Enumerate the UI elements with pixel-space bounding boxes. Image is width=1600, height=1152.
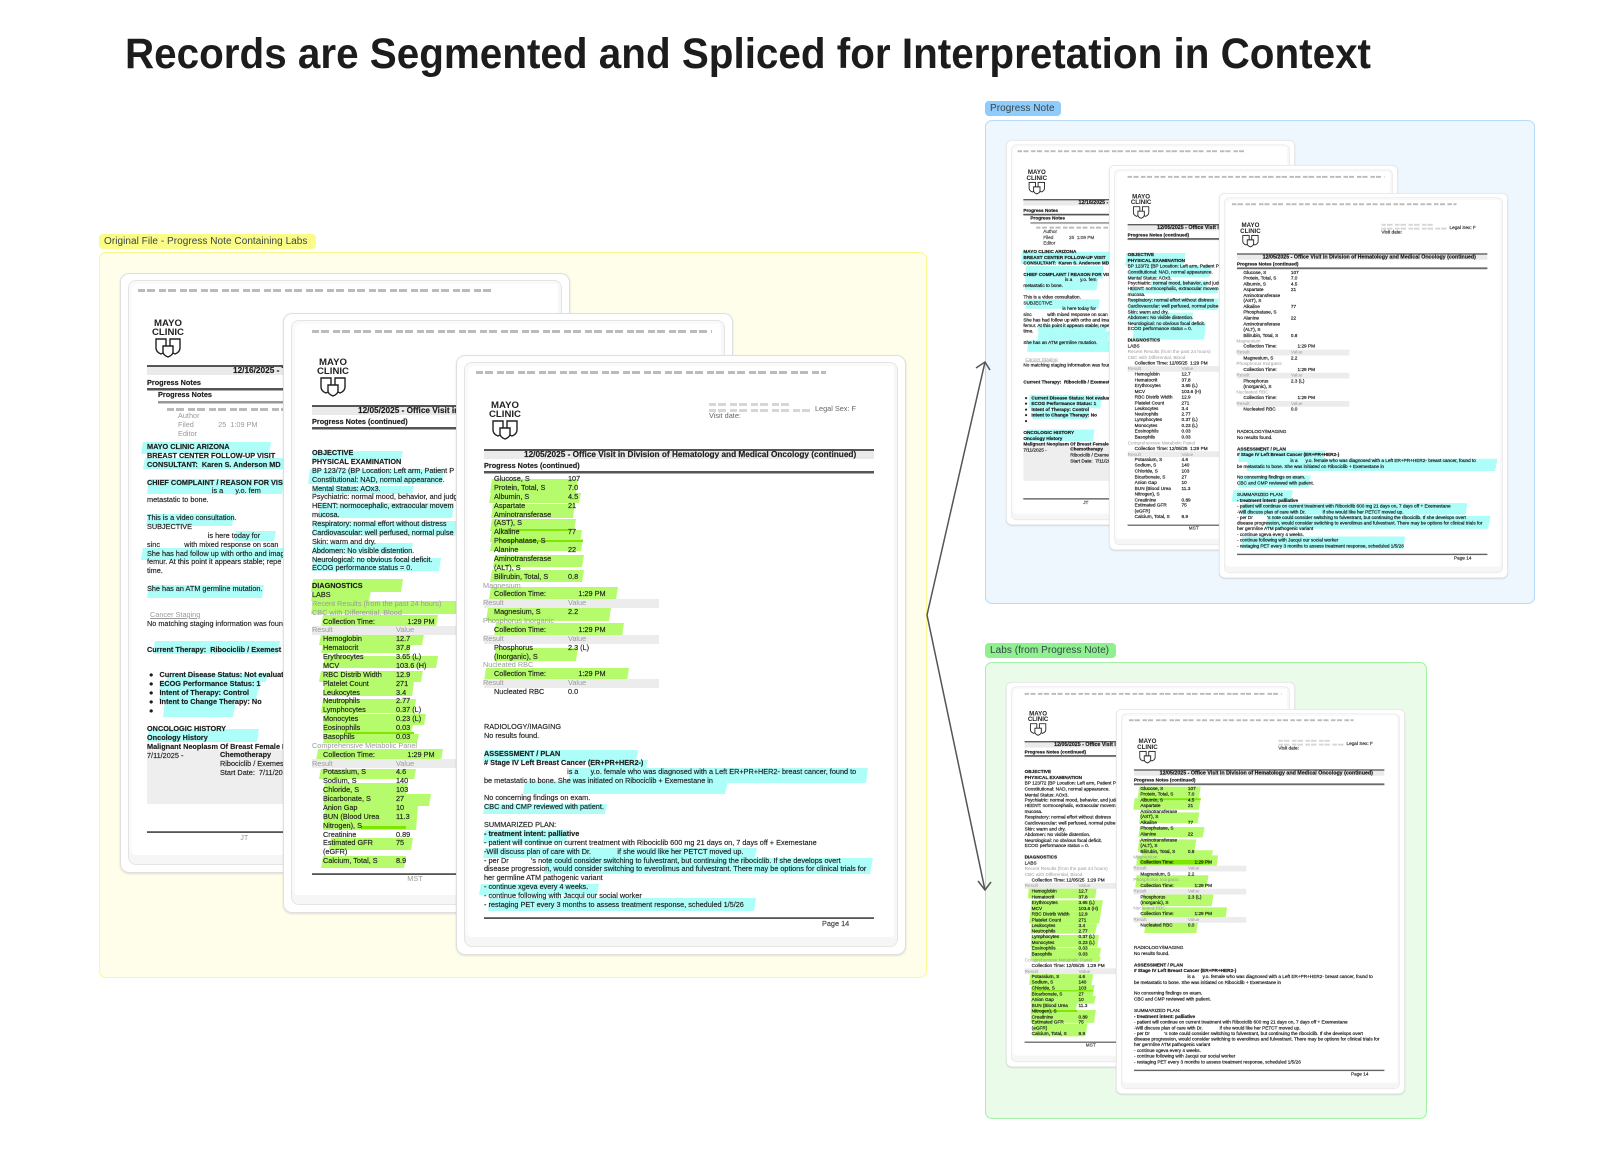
logo: MAYO CLINIC: [1240, 222, 1261, 234]
lab labels: Collection Time: 1:29 PM Result Hemoglobin Hematocrit Erythrocytes MCV RBC Distrib Width Platelet Count Leukocytes Neutrophils Lymphocytes Monocytes Eosinophils Basophils Comprehensive Metabolic Panel Collection Time: 1:29 PM Result Potassium, S Sodium, S Chloride, S Bicarbonate, S Anion Gap BUN (Blood Urea Nitrogen), S Creatinine Estimated GFR (eGFR) Calcium, Total, S: [312, 616, 435, 865]
logo: [317, 357, 349, 397]
panel: progress note: [985, 120, 1535, 604]
oncologic history: ONCOLOGIC HISTORY Oncology History Malignant Neoplasm Of Breast Female Left 7/11/2025 -: [147, 724, 295, 760]
page: progress note page 1: Progress Notes: [1030, 215, 1065, 221]
logo: [152, 318, 184, 358]
page: original progress note page 2: [283, 313, 733, 913]
date heading: 12/05/2025 - Office Visit in Division of Hematology and Medical Oncology (continued): [1263, 254, 1476, 260]
lab values: 107 7.0 4.5 21 77 22 0.8 Value 2.2 Value 2.3 (L) Value 0.0: [568, 474, 589, 696]
badge: original file: [99, 234, 316, 249]
logo: MAYO CLINIC: [152, 318, 184, 338]
logo: [1128, 739, 1167, 769]
lab labels: Glucose, S Protein, Total, S Albumin, S Aspartate Aminotransferase (AST), S Alkaline Phosphatase, S Alanine Aminotransferase (ALT), S Bilirubin, Total, S Magnesium Collection Time: 1:29 PM Result Magnesium, S Phosphorus Inorganic Collection Time: 1:29 PM Result Phosphorus (Inorganic), S Nucleated RBC Collection Time: 1:29 PM Result Nucleated RBC: [1133, 785, 1212, 928]
date heading: 12/05/2025 - Office Visit in Di: [1157, 225, 1229, 230]
highlights: [479, 479, 873, 911]
highlights: [1125, 253, 1219, 340]
patient header: Legal Sex: F: [1449, 224, 1476, 230]
progress notes heading: Progress Notes (continued): [1134, 777, 1195, 783]
page: original progress note page 1: [120, 273, 570, 873]
logo: MAYO CLINIC: [317, 357, 349, 377]
badge: labs: [985, 643, 1116, 658]
oncologic history: ONCOLOGIC HISTORY Oncology History Malignant Neoplasm Of Breast Female Left 7/11/2025 -: [1023, 430, 1119, 452]
current therapy: Current Therapy: Ribociclib / Exemest: [1023, 379, 1110, 385]
highlights: [1007, 683, 1296, 1068]
lab labels: Collection Time: 12/05/25 1:29 PM Result Hemoglobin Hematocrit Erythrocytes MCV RBC Distrib Width Platelet Count Leukocytes Neutrophils Lymphocytes Monocytes Eosinophils Basophils Comprehensive Metabolic Panel Collection Time: 12/05/25 1:29 PM Result Potassium, S Sodium, S Chloride, S Bicarbonate, S Anion Gap BUN (Blood Urea Nitrogen), S Creatinine Estimated GFR (eGFR) Calcium, Total, S: [1128, 360, 1208, 519]
therapy table: Chemotherapy Ribociclib / Exemes Start Date: 7/11/20: [1070, 446, 1111, 463]
progress notes heading: Progress Notes: [1023, 207, 1058, 213]
badge: original file: Original File - Progress Note Containing Labs: [104, 236, 307, 247]
lab labels: Glucose, S Protein, Total, S Albumin, S Aspartate Aminotransferase (AST), S Alkaline Phosphatase, S Alanine Aminotransferase (ALT), S Bilirubin, Total, S Magnesium Collection Time: 1:29 PM Result Magnesium, S Phosphorus Inorganic Collection Time: 1:29 PM Result Phosphorus (Inorganic), S Nucleated RBC Collection Time: 1:29 PM Result Nucleated RBC: [1236, 269, 1315, 412]
assessment and plan: RADIOLOGY/IMAGING No results found. ASSESSMENT / PLAN # Stage IV Left Breast Cancer (ER+PR+HER2-) is a y.o. female who was diagnosed with a Left ER+PR+HER2- breast cancer, found to be metastatic to bone. She was initiated on Ribociclib + Exemestane in No concerning findings on exam. CBC and CMP reviewed with patient. SUMMARIZED PLAN: - treatment intent: palliative - patient will continue on current treatment with Ribociclib 600 mg 21 days on, 7 days off + Exemestane -Will discuss plan of care with Dr. if she would like her PETCT moved up. - per Dr 's note could consider switching to fulvestrant, but continuing the ribociclib. If she develops overt disease progression, would consider switching to everolimus and fulvestrant. There may be options for clinical trials for her germline ATM pathogenic variant - continue xgeva every 4 weeks. - continue following with Jacqui our social worker - restaging PET every 3 months to assess treatment response, scheduled 1/5/26: [1134, 945, 1379, 1065]
page: labs page 2: Visit date:: [1278, 745, 1299, 751]
lab labels: Glucose, S Protein, Total, S Albumin, S Aspartate Aminotransferase (AST), S Alkaline Phosphatase, S Alanine Aminotransferase (ALT), S Bilirubin, Total, S Magnesium Collection Time: 1:29 PM Result Magnesium, S Phosphorus Inorganic Collection Time: 1:29 PM Result Phosphorus (Inorganic), S Nucleated RBC Collection Time: 1:29 PM Result Nucleated RBC: [483, 474, 606, 696]
progress notes heading: Progress Notes: [147, 378, 201, 387]
footer: MST: [1189, 525, 1199, 531]
arrow: to progress note: [920, 355, 1000, 623]
progress notes heading: Progress Notes (continued): [312, 417, 408, 426]
footer: JT: [240, 833, 248, 842]
page number: Page 14: [1454, 555, 1471, 561]
progress notes heading: Progress Notes (continued): [1128, 232, 1189, 238]
highlights: [1117, 710, 1406, 1095]
page: labs page 1: [1006, 682, 1295, 1067]
logo: MAYO CLINIC: [1028, 710, 1048, 723]
badge: progress note: [985, 101, 1061, 116]
progress notes heading: Progress Notes (continued): [1025, 749, 1086, 755]
lab values: 107 7.0 4.5 21 77 22 0.8 Value 2.2 Value 2.3 (L) Value 0.0: [1291, 269, 1304, 412]
page: original progress note page 1: Progress Notes: [158, 390, 212, 399]
logo: MAYO CLINIC: [1027, 169, 1047, 181]
panel: labs: [985, 662, 1427, 1119]
footer: MST: [407, 874, 423, 883]
page number: Page 14: [822, 919, 849, 928]
date heading: 12/16/2025 - Te: [233, 366, 291, 375]
footer: JT: [1083, 500, 1088, 505]
page: progress note page 2: [1109, 165, 1398, 550]
lab labels: Collection Time: 12/05/25 1:29 PM Result Hemoglobin Hematocrit Erythrocytes MCV RBC Distrib Width Platelet Count Leukocytes Neutrophils Lymphocytes Monocytes Eosinophils Basophils Comprehensive Metabolic Panel Collection Time: 12/05/25 1:29 PM Result Potassium, S Sodium, S Chloride, S Bicarbonate, S Anion Gap BUN (Blood Urea Nitrogen), S Creatinine Estimated GFR (eGFR) Calcium, Total, S: [1025, 877, 1105, 1036]
logo: [1131, 193, 1152, 219]
lab values: Value 12.7 37.8 3.65 (L) 103.6 (H) 12.9 271 3.4 2.77 0.37 (L) 0.23 (L) 0.03 0.03 Value 4.6 140 103 27 10 11.3 0.89 75 8.9: [396, 625, 426, 865]
date heading: 12/05/2025 - Office Visit in Di: [358, 406, 470, 415]
panel: original file: [99, 252, 927, 978]
date heading: 12/05/2025 - Office Visit in Division of Hematology and Medical Oncology (continued): [524, 450, 856, 459]
date heading: 12/05/2025 - Office Visit in Division of Hematology and Medical Oncology (continued): [1160, 770, 1373, 776]
note body text: MAYO CLINIC ARIZONA BREAST CENTER FOLLOW-UP VISIT CONSULTANT: Karen S. Anderson MD CHIEF COMPLAINT / REASON FOR VIS is a y.o. fem metastatic to bone. This is a video consultation. SUBJECTIVE is here today for sinc with mixed response on scan She has had follow up with ortho and imag femur. At this point it appears stable; repe time. She has an ATM germline mutation.: [1023, 248, 1112, 345]
cancer staging: Cancer Staging No matching staging information was found for: [1023, 356, 1120, 368]
page: progress note page 1: [1006, 140, 1295, 525]
date heading: 12/16/2025 - Te: [1079, 200, 1116, 205]
progress notes heading: Progress Notes (continued): [484, 461, 580, 470]
logo: [1026, 169, 1047, 194]
date heading: 12/05/2025 - Office Visit in Di: [1054, 742, 1126, 747]
exam and labs headings: OBJECTIVE PHYSICAL EXAMINATION BP 123/72 (BP Location: Left arm, Patient P Constitutional: NAD, normal appearance. Mental Status: AOx3. Psychiatric: normal mood, behavior, and judg HEENT: normocephalic, extraocular movem mucosa. Respiratory: normal effort without distress Cardiovascular: well perfused, normal pulse Skin: warm and dry. Abdomen: No visible distention. Neurological: no obvious focal deficit. ECOG performance status = 0. DIAGNOSTICS LABS Recent Results (from the past 24 hours) CBC with Differential, Blood: [312, 448, 458, 617]
status bullets: ● Current Disease Status: Not evaluat ● ECOG Performance Status: 1 ● Intent of Therapy: Control ● Intent to Change Therapy: No ●: [149, 670, 284, 714]
assessment and plan: RADIOLOGY/IMAGING No results found. ASSESSMENT / PLAN # Stage IV Left Breast Cancer (ER+PR+HER2-) is a y.o. female who was diagnosed with a Left ER+PR+HER2- breast cancer, found to be metastatic to bone. She was initiated on Ribociclib + Exemestane in No concerning findings on exam. CBC and CMP reviewed with patient. SUMMARIZED PLAN: - treatment intent: palliative - patient will continue on current treatment with Ribociclib 600 mg 21 days on, 7 days off + Exemestane -Will discuss plan of care with Dr. if she would like her PETCT moved up. - per Dr 's note could consider switching to fulvestrant, but continuing the ribociclib. If she develops overt disease progression, would consider switching to everolimus and fulvestrant. There may be options for clinical trials for her germline ATM pathogenic variant - continue xgeva every 4 weeks. - continue following with Jacqui our social worker - restaging PET every 3 months to assess treatment response, scheduled 1/5/26: [1237, 429, 1482, 549]
cyan highlights: [141, 442, 283, 742]
page: progress note page 3: [1219, 193, 1508, 578]
page: labs page 2: [1116, 709, 1405, 1094]
title: Records are Segmented and Spliced for Interpretation in Context: [125, 30, 1371, 78]
page: original progress note page 3: Visit date:: [709, 411, 741, 420]
badge: progress note: Progress Note: [990, 103, 1055, 114]
page: original progress note page 3: [456, 355, 906, 955]
logo: MAYO CLINIC: [1137, 738, 1158, 750]
therapy table: Chemotherapy Ribociclib / Exemes Start Date: 7/11/20: [220, 750, 284, 777]
assessment and plan: RADIOLOGY/IMAGING No results found. ASSESSMENT / PLAN # Stage IV Left Breast Cancer (ER+PR+HER2-) is a y.o. female who was diagnosed with a Left ER+PR+HER2- breast cancer, found to be metastatic to bone. She was initiated on Ribociclib + Exemestane in No concerning findings on exam. CBC and CMP reviewed with patient. SUMMARIZED PLAN: - treatment intent: palliative - patient will continue on current treatment with Ribociclib 600 mg 21 days on, 7 days off + Exemestane -Will discuss plan of care with Dr. if she would like her PETCT moved up. - per Dr 's note could consider switching to fulvestrant, but continuing the ribociclib. If she develops overt disease progression, would consider switching to everolimus and fulvestrant. There may be options for clinical trials for her germline ATM pathogenic variant - continue xgeva every 4 weeks. - continue following with Jacqui our social worker - restaging PET every 3 months to assess treatment response, scheduled 1/5/26: [484, 722, 866, 909]
patient header: Legal Sex: F: [1346, 740, 1373, 746]
note body text: MAYO CLINIC ARIZONA BREAST CENTER FOLLOW-UP VISIT CONSULTANT: Karen S. Anderson MD CHIEF COMPLAINT / REASON FOR VIS is a y.o. fem metastatic to bone. This is a video consultation. SUBJECTIVE is here today for sinc with mixed response on scan She has had follow up with ortho and imag femur. At this point it appears stable; repe time. She has an ATM germline mutation.: [147, 442, 285, 593]
arrow: to labs: [920, 610, 1000, 900]
footer: MST: [1086, 1042, 1096, 1048]
highlights: [308, 451, 456, 868]
exam and labs headings: OBJECTIVE PHYSICAL EXAMINATION BP 123/72 (BP Location: Left arm, Patient P Constitutional: NAD, normal appearance. Mental Status: AOx3. Psychiatric: normal mood, behavior, and judg HEENT: normocephalic, extraocular movem mucosa. Respiratory: normal effort without distress Cardiovascular: well perfused, normal pulse Skin: warm and dry. Abdomen: No visible distention. Neurological: no obvious focal deficit. ECOG performance status = 0. DIAGNOSTICS LABS Recent Results (from the past 24 hours) CBC with Differential, Blood: [1025, 769, 1118, 877]
page number: Page 14: [1351, 1071, 1368, 1077]
highlights: [1020, 252, 1109, 442]
logo: [1231, 223, 1270, 253]
lab values: Value 12.7 37.8 3.65 (L) 103.6 (H) 12.9 271 3.4 2.77 0.37 (L) 0.23 (L) 0.03 0.03 Value 4.6 140 103 27 10 11.3 0.89 75 8.9: [1079, 883, 1098, 1036]
patient header: Legal Sex: F: [815, 404, 856, 413]
author block: Author Filed 25 1:09 PM Editor: [1043, 229, 1094, 246]
lab values: 107 7.0 4.5 21 77 22 0.8 Value 2.2 Value 2.3 (L) Value 0.0: [1188, 785, 1201, 928]
current therapy: Current Therapy: Ribociclib / Exemest: [147, 645, 281, 654]
progress notes heading: Progress Notes (continued): [1237, 261, 1298, 267]
author block: Author Filed 25 1:09 PM Editor: [178, 411, 258, 438]
lab values: Value 12.7 37.8 3.65 (L) 103.6 (H) 12.9 271 3.4 2.77 0.37 (L) 0.23 (L) 0.03 0.03 Value 4.6 140 103 27 10 11.3 0.89 75 8.9: [1182, 366, 1201, 519]
status bullets: ● Current Disease Status: Not evaluat ● ECOG Performance Status: 1 ● Intent of Therapy: Control ● Intent to Change Therapy: No ●: [1025, 395, 1111, 423]
logo: [489, 400, 521, 440]
badge: labs: Labs (from Progress Note): [990, 645, 1109, 656]
highlights: [1220, 194, 1509, 579]
logo: [1019, 712, 1057, 741]
logo: MAYO CLINIC: [489, 400, 521, 420]
cancer staging: Cancer Staging No matching staging information was found for: [147, 610, 297, 628]
page: progress note page 3: Visit date:: [1381, 229, 1402, 235]
logo: MAYO CLINIC: [1131, 193, 1151, 206]
exam and labs headings: OBJECTIVE PHYSICAL EXAMINATION BP 123/72 (BP Location: Left arm, Patient P Constitutional: NAD, normal appearance. Mental Status: AOx3. Psychiatric: normal mood, behavior, and judg HEENT: normocephalic, extraocular movem mucosa. Respiratory: normal effort without distress Cardiovascular: well perfused, normal pulse Skin: warm and dry. Abdomen: No visible distention. Neurological: no obvious focal deficit. ECOG performance status = 0. DIAGNOSTICS LABS Recent Results (from the past 24 hours) CBC with Differential, Blood: [1128, 252, 1221, 360]
